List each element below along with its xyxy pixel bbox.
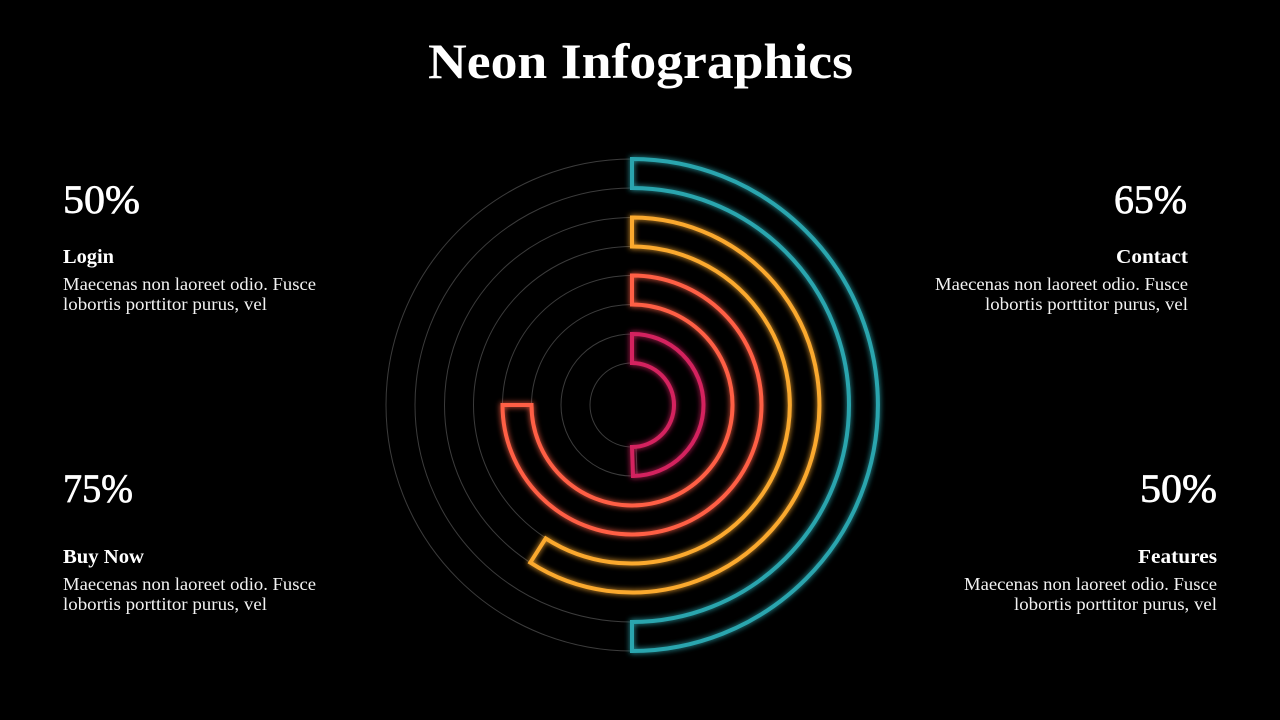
text: contact description: Maecenas non laoreet odio. Fusce [935, 274, 1188, 294]
text: buy now description: Maecenas non laoreet odio. Fusce [63, 574, 316, 594]
arc: orange 50% Features [530, 218, 819, 592]
text: contact description: lobortis porttitor purus, vel [985, 294, 1188, 314]
text: login description: lobortis porttitor purus, vel [63, 294, 267, 314]
arc: teal 65% Contact [632, 159, 878, 651]
text: login description [63, 274, 316, 314]
heading: buy now: Buy Now [63, 546, 145, 568]
value: login percent: 50% [63, 177, 140, 222]
chart: concentric radial progress [386, 159, 878, 651]
heading: features: Features [1138, 546, 1217, 568]
text: features description [964, 574, 1217, 614]
text: buy now description [63, 574, 316, 614]
heading: login: Login [63, 246, 114, 268]
value: contact percent: 65% [1114, 177, 1187, 222]
arc: red 75% Buy Now [502, 276, 761, 534]
chart guide rings [386, 159, 878, 651]
text: buy now description: lobortis porttitor purus, vel [63, 594, 267, 614]
heading: contact: Contact [1116, 246, 1188, 268]
value: buy now percent: 75% [63, 466, 133, 511]
panel: contact [935, 177, 1188, 314]
text: features description: Maecenas non laoreet odio. Fusce [964, 574, 1217, 594]
panel: features [964, 466, 1217, 614]
text: login description: Maecenas non laoreet odio. Fusce [63, 274, 316, 294]
panel: buy now [63, 466, 316, 614]
text: contact description [935, 274, 1188, 314]
value: features percent: 50% [1140, 466, 1217, 511]
text: features description: lobortis porttitor purus, vel [1014, 594, 1217, 614]
panel: login [63, 177, 316, 314]
title: Neon Infographics [428, 33, 853, 89]
arc: pink 50% Login [632, 334, 704, 476]
